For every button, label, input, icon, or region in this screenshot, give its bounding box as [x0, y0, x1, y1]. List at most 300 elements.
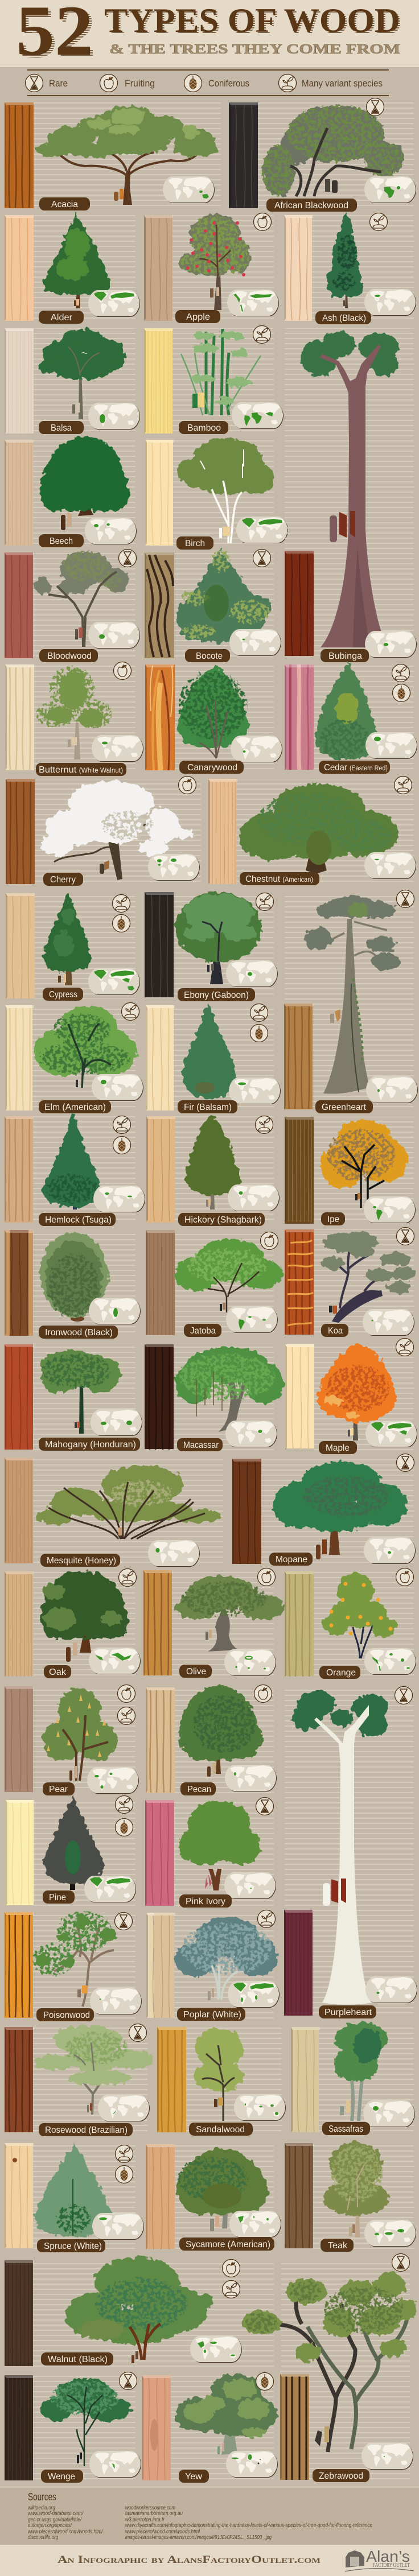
sources list left: wikipedia.org — [28, 2504, 55, 2511]
label: koa — [321, 1324, 348, 1337]
panel: Purpleheart — [284, 1686, 417, 2018]
panel: Apple — [144, 213, 279, 323]
plank: beech — [5, 440, 34, 546]
tree: pecan — [179, 1685, 262, 1777]
icon: coniferous — [250, 1024, 268, 1042]
icon: variant — [113, 894, 130, 913]
label: orange: Orange — [326, 1668, 356, 1678]
plank: mesquite — [5, 1458, 34, 1563]
panel: Orange — [285, 1568, 416, 1679]
tree: ironwood — [40, 1232, 108, 1322]
tree: jatoba — [175, 1239, 283, 1312]
label: ebony — [178, 988, 255, 1001]
map: oak — [89, 1648, 141, 1674]
panel: Balsa — [5, 328, 140, 434]
label: acacia: Acacia — [51, 200, 78, 209]
plank: butternut — [5, 664, 34, 770]
sources list right: www.piecesofwood.com/woods.html — [125, 2528, 200, 2535]
panel: Bloodwood — [5, 550, 140, 662]
icon: variant — [253, 325, 271, 344]
map: teak — [364, 2220, 416, 2247]
label: poplar — [177, 2008, 245, 2021]
map: yew — [226, 2451, 278, 2478]
icon: rare — [396, 1454, 414, 1471]
plank: hickory — [146, 1116, 175, 1223]
label: maple — [319, 1441, 357, 1454]
legend icon: many variant species — [279, 74, 296, 92]
plank: alder — [5, 215, 34, 321]
panel: Butternut — [5, 662, 143, 776]
plank: poisonwood — [5, 1912, 34, 2018]
tree: macassar — [175, 1347, 284, 1432]
plank: greenheart — [284, 1004, 313, 1109]
label: sandalwood: Sandalwood — [196, 2125, 245, 2135]
tree: bubinga — [301, 332, 399, 647]
header band — [0, 0, 419, 73]
panel: Fir (Balsam) — [146, 1000, 281, 1113]
tree: apple — [178, 214, 250, 310]
label: sandalwood — [189, 2123, 253, 2136]
map: sassafras — [363, 2100, 415, 2127]
map: cypress — [88, 968, 140, 995]
map: spruce — [92, 2213, 144, 2240]
plank: cherry — [6, 779, 35, 885]
panel: Cedar (Eastern Red) — [285, 663, 417, 774]
label: walnut: Walnut (Black) — [48, 2355, 108, 2364]
label: mesquite — [40, 1554, 120, 1567]
map: bubinga — [365, 631, 417, 658]
icon: rare — [396, 890, 414, 908]
tree: purpleheart — [291, 1691, 388, 2005]
label: pecan — [180, 1782, 216, 1795]
label: pine — [43, 1890, 75, 1904]
tree: greenheart — [305, 896, 401, 1094]
tree: canarywood — [178, 664, 248, 758]
plank: sycamore — [146, 2144, 175, 2250]
label: sycamore — [179, 2238, 274, 2251]
plank: cedar — [285, 664, 314, 770]
panel: Sassafras — [291, 2022, 415, 2135]
panel: Birch — [145, 438, 288, 550]
tree: african blackwood — [263, 105, 404, 196]
plank: sandalwood — [157, 2027, 186, 2133]
icon: variant — [250, 1004, 268, 1022]
label: cherry — [43, 873, 83, 886]
panel: Bocote — [145, 549, 281, 662]
map: greenheart — [366, 1076, 418, 1103]
tree: wenge — [41, 2378, 131, 2466]
label: birch: Birch — [185, 539, 205, 548]
label: ash — [315, 311, 371, 324]
map: cedar — [365, 732, 417, 759]
map: beech — [85, 518, 137, 544]
plank: pecan — [146, 1687, 175, 1793]
label: elm: Elm (American) — [44, 1103, 106, 1112]
panel: Olive — [143, 1568, 285, 1678]
label: zebrawood — [313, 2469, 369, 2482]
label: fir: Fir (Balsam) — [184, 1103, 232, 1112]
icon: variant — [255, 1116, 273, 1133]
label: cedar: Cedar (Eastern Red) — [324, 763, 388, 773]
panel: Beech — [5, 436, 137, 547]
map: bocote — [229, 629, 281, 656]
legend icon: rare — [25, 74, 43, 92]
sources list right: w3.pierroton.inra.fr — [125, 2516, 165, 2523]
tree: ipe — [321, 1120, 408, 1208]
icon: fruiting — [254, 213, 271, 231]
label: walnut — [41, 2352, 113, 2366]
sources heading: Sources — [28, 2491, 56, 2503]
sources list left: gec.cr.usgs.gov/data/little/ — [28, 2516, 82, 2523]
label: beech — [39, 534, 84, 547]
panel: Greenheart — [284, 890, 418, 1113]
map: elm — [92, 1074, 143, 1101]
label: yew — [179, 2470, 209, 2483]
tree: bocote — [176, 549, 272, 642]
plank: bubinga — [285, 551, 314, 657]
plank: ebony — [145, 892, 174, 998]
label: sycamore: Sycamore (American) — [186, 2240, 270, 2249]
label: olive: Olive — [186, 1667, 206, 1677]
plank: spruce — [5, 2143, 34, 2249]
label: pine: Pine — [49, 1893, 66, 1902]
map: mahogany — [91, 1409, 142, 1436]
panel: Chestnut (American) — [208, 776, 416, 885]
label: mahogany: Mahogany (Honduran) — [45, 1440, 136, 1450]
label: canarywood: Canarywood — [187, 763, 237, 773]
tree: hickory — [185, 1114, 241, 1209]
label: bubinga: Bubinga — [328, 651, 362, 661]
plank: hemlock — [5, 1116, 34, 1223]
label: wenge: Wenge — [48, 2472, 75, 2482]
sources list right — [125, 2504, 372, 2541]
label: pink ivory: Pink Ivory — [186, 1897, 225, 1906]
panel: Oak — [5, 1569, 141, 1678]
logo: Alan's Factory Outlet — [345, 2548, 414, 2571]
panel: Pecan — [146, 1685, 277, 1795]
legend: fruiting: Fruiting — [125, 78, 155, 89]
map: acacia — [163, 176, 215, 203]
map: mesquite — [148, 1540, 200, 1567]
tree: hemlock — [43, 1112, 103, 1209]
label: cedar — [319, 761, 390, 774]
label: hickory — [178, 1213, 265, 1226]
plank: purpleheart — [284, 1910, 313, 2016]
label: ipe — [321, 1212, 345, 1225]
tree: cypress — [43, 893, 91, 985]
label: rosewood: Rosewood (Brazilian) — [45, 2125, 128, 2135]
map: alder — [88, 290, 140, 317]
label: bamboo — [179, 421, 228, 434]
map: ebony — [226, 960, 278, 987]
label: hickory: Hickory (Shagbark) — [184, 1215, 262, 1225]
panel: Pine — [6, 1795, 136, 1906]
panel: Yew — [142, 2372, 278, 2483]
icon: variant — [222, 2280, 240, 2298]
panel: African Blackwood — [229, 98, 416, 212]
plank: bloodwood — [5, 552, 34, 658]
label: canarywood — [179, 761, 244, 774]
label: rosewood — [39, 2123, 133, 2136]
tree: pear — [43, 1688, 117, 1781]
icon: variant — [113, 1116, 131, 1133]
label: beech: Beech — [50, 536, 73, 546]
panel: Canarywood — [145, 664, 282, 774]
map: orange — [364, 1648, 416, 1675]
map: pink ivory — [224, 1872, 276, 1899]
label: african blackwood: African Blackwood — [274, 201, 348, 210]
icon: coniferous — [115, 2165, 133, 2183]
sources list left: discoverlife.org — [28, 2534, 58, 2541]
tree: yew — [175, 2374, 278, 2455]
label: cherry: Cherry — [50, 875, 76, 885]
map: jatoba — [226, 1306, 278, 1333]
icon: rare — [256, 1798, 273, 1815]
legend — [25, 69, 389, 96]
icon: variant — [118, 1569, 137, 1586]
map: pear — [87, 1767, 139, 1794]
panel: Ebony (Gaboon) — [145, 892, 278, 1001]
map: koa — [363, 1309, 414, 1336]
panel: Cypress — [6, 893, 140, 1001]
tree: pine — [44, 1795, 105, 1890]
tree: oak — [41, 1571, 129, 1662]
panel: Hemlock (Tsuga) — [5, 1112, 145, 1226]
panel: Bamboo — [144, 325, 284, 434]
tree: ash — [327, 214, 363, 308]
label: elm — [39, 1100, 111, 1113]
label: bocote: Bocote — [196, 651, 223, 661]
map: ash — [364, 289, 416, 316]
label: african blackwood — [266, 199, 357, 212]
label: chestnut: Chestnut (American) — [245, 874, 313, 884]
tree: cedar — [315, 663, 377, 759]
label: purpleheart: Purpleheart — [324, 2008, 372, 2017]
label: pear — [43, 1782, 75, 1795]
map: poplar — [228, 1981, 280, 2008]
panel: Hickory (Shagbark) — [146, 1114, 280, 1226]
sources list left: euforgen.org/species/ — [28, 2522, 72, 2529]
label: hemlock — [39, 1213, 116, 1226]
map: olive — [224, 1649, 276, 1676]
tree: fir — [182, 1000, 236, 1100]
tree: sycamore — [176, 2148, 268, 2231]
tree: cherry — [40, 781, 195, 880]
tree: koa — [320, 1232, 416, 1323]
map: balsa — [88, 403, 140, 430]
title: types of wood: TYPES OF WOOD — [106, 3, 402, 41]
map: pine — [84, 1876, 136, 1902]
label: chestnut — [240, 872, 319, 885]
label: wenge — [41, 2470, 83, 2483]
label: spruce: Spruce (White) — [44, 2241, 102, 2251]
tree: spruce — [34, 2144, 113, 2237]
map: birch — [236, 517, 288, 543]
plank: rosewood — [5, 2027, 34, 2133]
map: zebrawood — [362, 2443, 413, 2470]
plank: oak — [5, 1571, 34, 1677]
panel: Poplar (White) — [146, 1910, 280, 2021]
label: maple: Maple — [326, 1443, 350, 1453]
panel: Poisonwood — [5, 1912, 142, 2021]
label: hemlock: Hemlock (Tsuga) — [45, 1215, 112, 1225]
plank: fir — [146, 1005, 175, 1111]
icon: rare — [129, 2024, 147, 2041]
icon: rare — [395, 1686, 412, 1704]
plank: zebrawood — [280, 2374, 309, 2480]
label: alder: Alder — [51, 313, 73, 323]
icon: variant — [396, 1338, 413, 1356]
icon: fruiting — [396, 1568, 413, 1586]
plank: apple — [144, 215, 173, 321]
map: maple — [365, 1421, 417, 1447]
logo: Alan's Factory Outlet: Alan’s — [366, 2548, 410, 2565]
icon: coniferous — [115, 1818, 133, 1836]
label: jatoba — [184, 1324, 221, 1337]
tree: bamboo — [181, 329, 261, 415]
icon: variant — [370, 213, 387, 231]
label: bocote — [185, 649, 230, 662]
icon: coniferous — [113, 915, 130, 932]
legend icon: fruiting — [100, 74, 117, 92]
label: butternut — [36, 763, 126, 776]
tree: sandalwood — [194, 2028, 244, 2121]
tree: sassafras — [333, 2022, 388, 2121]
plank: mopane — [232, 1459, 261, 1564]
tree: poisonwood — [34, 1912, 116, 2007]
sources list right: images-na.ssl-images-amazon.com/images/I/91JEv0P24SL._SL1500_.jpg — [125, 2534, 272, 2541]
label: teak — [321, 2239, 354, 2252]
label: sassafras: Sassafras — [328, 2124, 363, 2134]
tree: teak — [323, 2142, 389, 2238]
tree: mopane — [273, 1462, 407, 1559]
map: macassar — [225, 1421, 277, 1447]
panel: Mopane — [232, 1454, 416, 1566]
panel: Mahogany (Honduran) — [5, 1344, 142, 1451]
legend: many variant species: Many variant species — [302, 78, 383, 89]
label: orange — [319, 1666, 360, 1679]
panel: Ipe — [285, 1117, 416, 1225]
panel: Alder — [5, 214, 140, 324]
icon: coniferous — [256, 2372, 273, 2391]
plank: ash — [284, 215, 313, 321]
map: canarywood — [231, 736, 282, 762]
map: wenge — [89, 2451, 141, 2478]
label: poplar: Poplar (White) — [183, 2010, 241, 2020]
tree: alder — [43, 214, 109, 308]
map: chestnut — [364, 852, 416, 879]
plank: pink ivory — [145, 1800, 174, 1906]
icon: fruiting — [222, 2260, 240, 2277]
icon: rare — [120, 2372, 137, 2389]
map: african blackwood — [364, 176, 416, 203]
label: bloodwood: Bloodwood — [47, 651, 92, 661]
plank: yew — [142, 2375, 171, 2481]
label: apple: Apple — [186, 312, 210, 322]
panel: Elm (American) — [5, 1002, 143, 1113]
label: mahogany — [39, 1438, 140, 1451]
plank: acacia — [5, 102, 34, 208]
map: fir — [229, 1078, 281, 1104]
label: pink ivory — [179, 1894, 232, 1908]
icon: variant — [115, 2145, 133, 2163]
panel: Teak — [285, 2142, 416, 2252]
panel: Bubinga — [285, 328, 417, 662]
tree: mesquite — [37, 1465, 222, 1539]
label: mesquite: Mesquite (Honey) — [47, 1556, 116, 1566]
label: spruce — [37, 2239, 105, 2252]
plank: maple — [285, 1344, 314, 1450]
sources list left — [28, 2504, 103, 2541]
icon: rare — [367, 98, 384, 116]
icon: variant — [117, 1707, 135, 1725]
plank: bamboo — [144, 328, 173, 434]
tree: bloodwood — [34, 551, 129, 647]
panel: Rosewood (Brazilian) — [5, 2024, 153, 2136]
subtitle: & THE TREES THEY COME FROM — [109, 42, 400, 57]
panel: Spruce (White) — [5, 2143, 144, 2252]
label: zebrawood: Zebrawood — [319, 2471, 363, 2481]
icon: rare — [396, 1228, 414, 1245]
map: bloodwood — [88, 622, 140, 649]
label: cypress: Cypress — [49, 990, 77, 1000]
tree: balsa — [39, 329, 125, 419]
icon: variant — [392, 664, 410, 682]
icon: rare — [118, 550, 137, 567]
tree: zebrawood — [243, 2273, 417, 2452]
plank: african blackwood — [229, 102, 258, 208]
tree: maple — [317, 1344, 396, 1440]
icon: fruiting — [261, 1232, 278, 1249]
plank: walnut — [5, 2260, 34, 2366]
map: butternut — [92, 735, 143, 762]
footer credit: An Infographic by AlansFactoryOutlet.com — [57, 2554, 321, 2566]
tree: orange — [322, 1573, 397, 1658]
label: fir — [178, 1100, 237, 1113]
icon: variant — [122, 1002, 139, 1021]
label: butternut: Butternut (White Walnut) — [39, 765, 123, 775]
icon: rare — [253, 550, 271, 567]
icon: fruiting — [179, 776, 196, 794]
plank: olive — [143, 1570, 172, 1676]
panel: Maple — [285, 1338, 417, 1454]
label: greenheart: Greenheart — [322, 1103, 367, 1112]
label: sassafras — [322, 2122, 370, 2135]
plank: sassafras — [291, 2027, 320, 2133]
label: jatoba: Jatoba — [190, 1326, 216, 1336]
label: poisonwood — [36, 2008, 94, 2021]
plank: cypress — [6, 893, 35, 999]
label: cypress — [43, 988, 83, 1001]
plank: ipe — [285, 1117, 314, 1224]
sources section — [0, 2487, 419, 2545]
icon: fruiting — [257, 1568, 276, 1586]
tree: butternut — [36, 667, 112, 759]
label: oak: Oak — [49, 1667, 67, 1677]
map: mopane — [364, 1537, 416, 1564]
icon: rare — [392, 2254, 410, 2271]
label: yew: Yew — [185, 2472, 202, 2482]
icon: variant — [394, 776, 412, 794]
label: ipe: Ipe — [327, 1215, 339, 1224]
panel: Zebrawood — [243, 2254, 417, 2482]
plank: ironwood — [5, 1230, 34, 1336]
panel: Walnut (Black) — [5, 2257, 274, 2367]
label: macassar: Macassar — [183, 1440, 219, 1450]
map: poisonwood — [90, 1988, 142, 2014]
map: purpleheart — [365, 1976, 417, 2003]
plank: wenge — [5, 2375, 34, 2481]
